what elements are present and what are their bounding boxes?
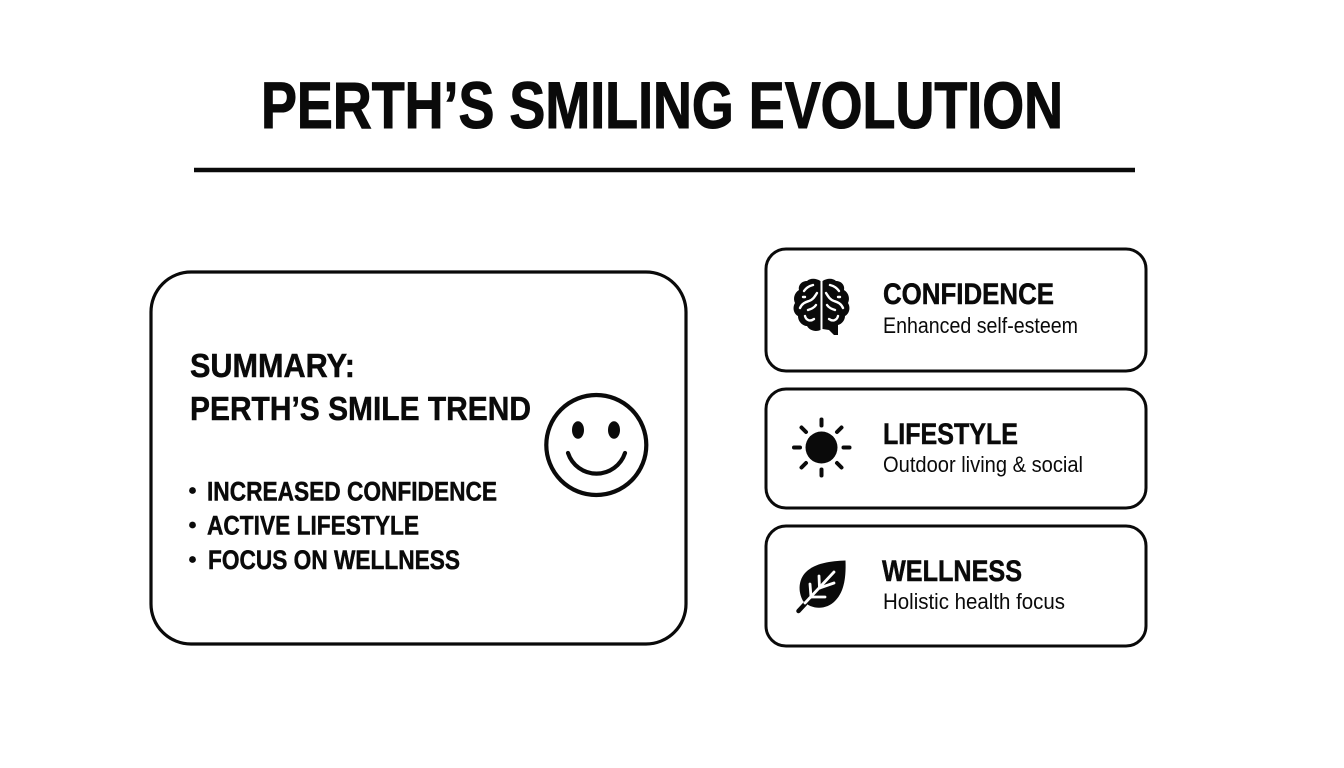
card text: confidence: CONFIDENCE <box>883 278 1054 311</box>
card text: confidence <box>883 278 1078 338</box>
card text: lifestyle: LIFESTYLE <box>883 418 1018 451</box>
card text: lifestyle: Outdoor living & social <box>883 452 1083 477</box>
panel: confidence <box>766 249 1146 371</box>
icon: sun <box>794 420 850 476</box>
bullet list: ACTIVE LIFESTYLE <box>207 510 419 540</box>
summary heading <box>190 348 531 428</box>
icon: leaf <box>798 560 846 611</box>
card text: lifestyle <box>883 418 1083 477</box>
summary heading: PERTH’S SMILE TREND <box>190 391 531 428</box>
bullet list <box>189 476 497 575</box>
card text: wellness <box>882 555 1065 614</box>
panel: summary <box>151 272 686 644</box>
card text: wellness: WELLNESS <box>882 555 1022 588</box>
panel: wellness <box>766 526 1146 646</box>
bullet list: INCREASED CONFIDENCE <box>207 476 497 506</box>
card text: confidence: Enhanced self-esteem <box>883 313 1078 338</box>
icon: brain <box>794 279 849 335</box>
icon: smiley face <box>546 395 646 495</box>
card text: wellness: Holistic health focus <box>883 589 1065 614</box>
summary heading: SUMMARY: <box>190 348 355 385</box>
bullet list: FOCUS ON WELLNESS <box>208 545 460 575</box>
panel: lifestyle <box>766 389 1146 508</box>
title: PERTH’S SMILING EVOLUTION <box>261 68 1063 142</box>
